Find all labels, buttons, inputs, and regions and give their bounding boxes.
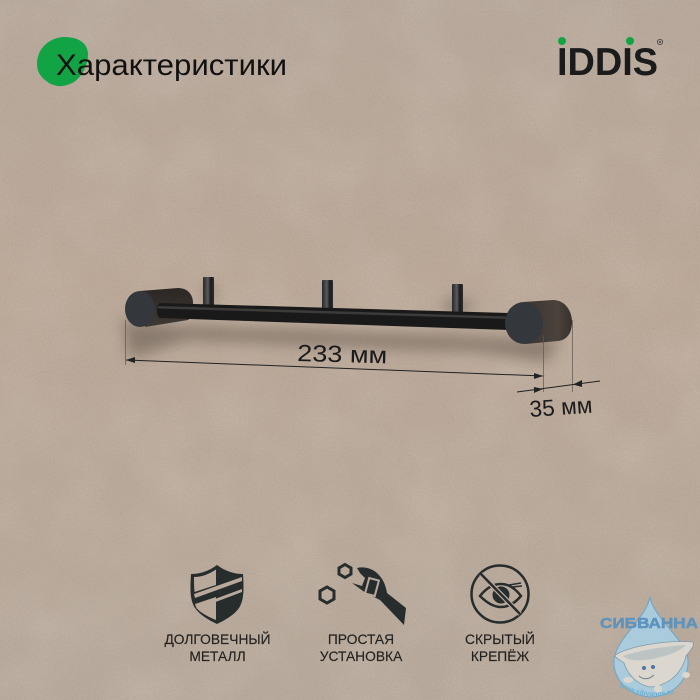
- soft shadows on the wall: [122, 285, 560, 362]
- hook post 3: [452, 284, 463, 316]
- rod: [157, 303, 510, 330]
- feature: hidden fastening: [465, 566, 535, 664]
- title: Характеристики: [37, 37, 287, 86]
- depth label: 35 мм: [529, 392, 593, 422]
- website: www.sibvanna.ru: [620, 683, 674, 696]
- right mount cylinder: [524, 300, 572, 344]
- bathtub: [615, 642, 693, 687]
- water drop: [614, 597, 688, 697]
- feature: hidden fastening: КРЕПЁЖ: [471, 648, 529, 664]
- label: ПРОСТАЯ: [328, 632, 394, 647]
- label: ДОЛГОВЕЧНЫЙ: [164, 630, 271, 647]
- watermark: Sibvanna logo: [600, 596, 698, 698]
- left cap: [125, 291, 155, 327]
- brand name: СИБВАННА: [600, 615, 698, 632]
- icon: wrench and nuts: [320, 564, 406, 625]
- icon: shield: [190, 565, 244, 624]
- feature: durable metal: МЕТАЛЛ: [189, 649, 246, 664]
- title text: Характеристики: [56, 49, 287, 82]
- dimension: length 233 mm: [126, 320, 543, 379]
- feature: durable metal: [164, 565, 271, 664]
- icon: crossed-out eye: [472, 566, 528, 622]
- tub feet: [623, 677, 633, 683]
- hook post 1: [203, 277, 214, 307]
- face: [642, 666, 646, 670]
- IDDIS logo: IDDIS: [557, 41, 658, 84]
- dimension: depth 35 mm: [517, 320, 600, 422]
- label: СКРЫТЫЙ: [465, 630, 535, 647]
- right cap: [505, 302, 543, 344]
- hook post 2: [322, 280, 333, 311]
- feature: simple installation: УСТАНОВКА: [320, 649, 403, 664]
- left mount cylinder: [140, 288, 193, 327]
- length label: 233 мм: [297, 340, 388, 368]
- feature: simple installation: [320, 564, 406, 664]
- towel rail product: [122, 277, 572, 362]
- green blob: [37, 37, 88, 86]
